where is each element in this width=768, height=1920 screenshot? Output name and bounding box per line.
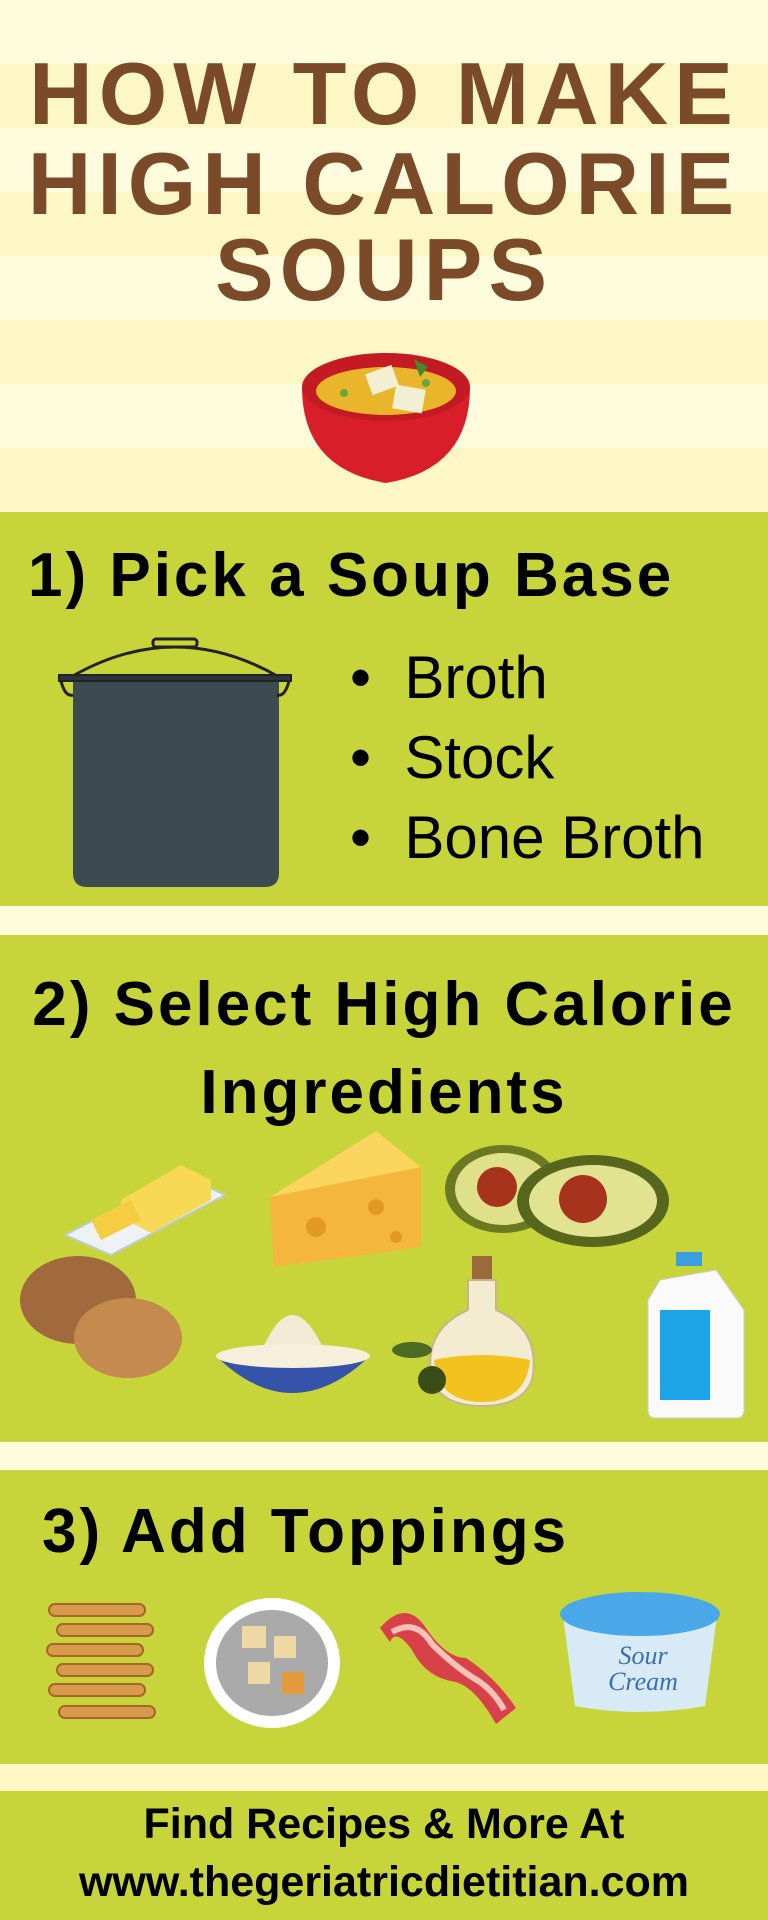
icon: stock pot xyxy=(58,638,292,887)
title xyxy=(28,44,740,319)
panel: select ingredients xyxy=(0,935,768,1442)
title: HIGH CALORIE xyxy=(28,134,740,233)
bullet list: • Bone Broth xyxy=(350,804,705,871)
icon: potatoes xyxy=(20,1256,182,1378)
icon: milk jug xyxy=(648,1252,744,1418)
icon: soup bowl xyxy=(302,353,470,483)
heading 3: 3) Add Toppings xyxy=(42,1497,569,1566)
icon: avocado xyxy=(445,1145,669,1247)
panel: add toppings xyxy=(0,1470,768,1764)
panel: pick a soup base xyxy=(0,512,768,906)
bullet list xyxy=(350,644,705,871)
icon: sour cream xyxy=(560,1592,720,1712)
bullet list: • Stock xyxy=(350,724,554,791)
heading 1: 1) Pick a Soup Base xyxy=(28,541,674,610)
title: SOUPS xyxy=(215,220,553,319)
icon: sour cream: Cream xyxy=(608,1667,678,1696)
icon: croutons bowl xyxy=(204,1598,340,1728)
heading 2: 2) Select High Calorie xyxy=(32,970,736,1039)
icon: cheese xyxy=(270,1131,421,1267)
heading 2 xyxy=(32,970,736,1127)
footer: Find Recipes & More At xyxy=(143,1800,625,1848)
icon: butter xyxy=(62,1165,227,1256)
footer xyxy=(0,1791,768,1920)
icon: sour cream: Sour xyxy=(618,1641,668,1670)
icon: bacon xyxy=(380,1613,516,1724)
footer: www.thegeriatricdietitian.com xyxy=(79,1858,689,1906)
title: HOW TO MAKE xyxy=(29,44,739,143)
icon: breadsticks xyxy=(46,1603,156,1719)
heading 2: Ingredients xyxy=(200,1058,568,1127)
bullet list: • Broth xyxy=(350,644,548,711)
icon: cream bowl xyxy=(216,1315,370,1393)
icon: olive oil xyxy=(392,1256,535,1407)
